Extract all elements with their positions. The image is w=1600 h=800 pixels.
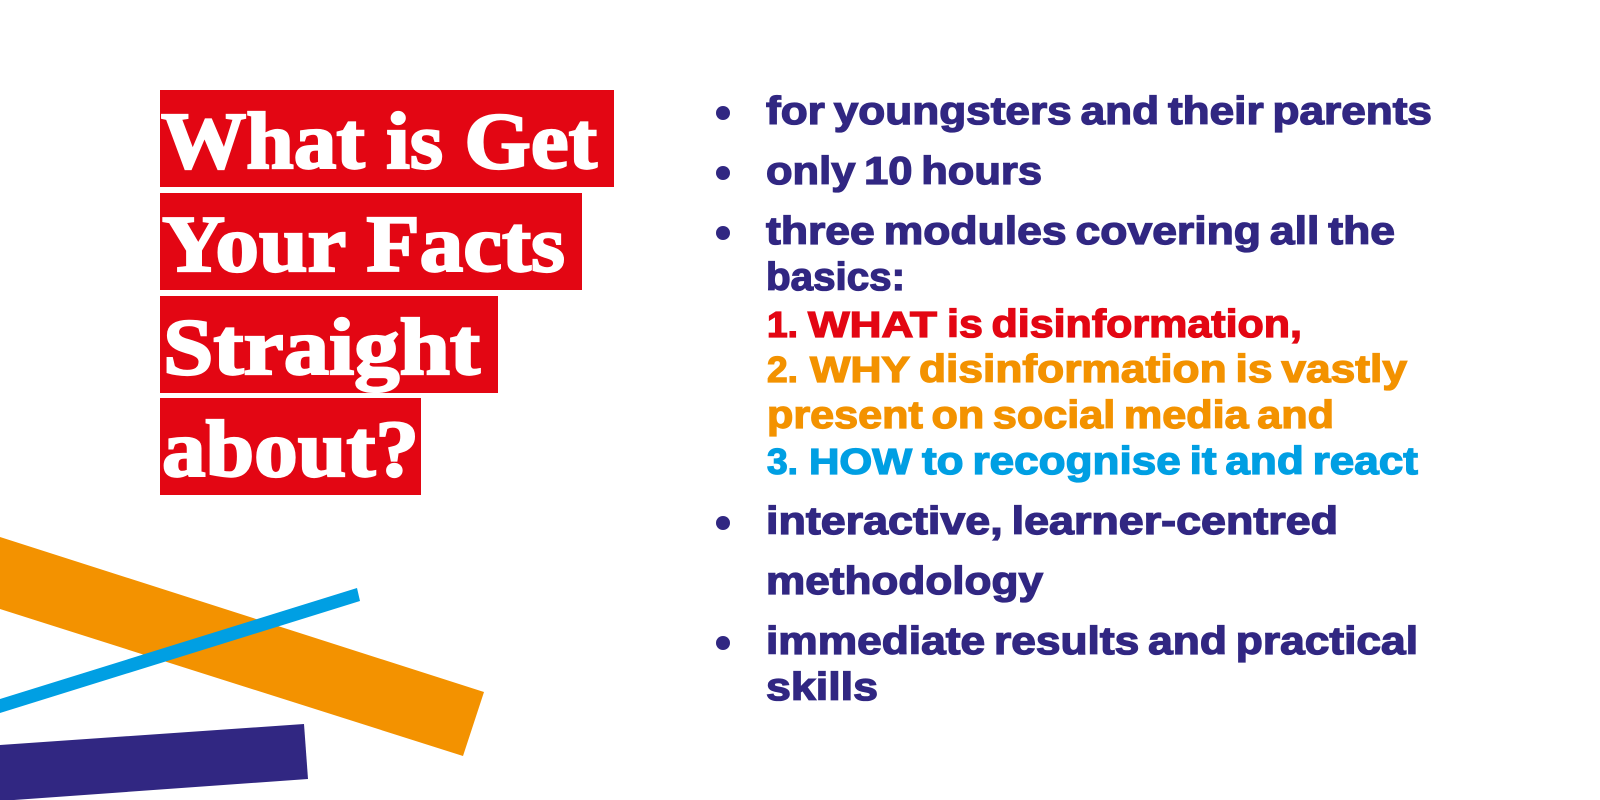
title line 1: What is Get xyxy=(161,98,597,186)
module 2: present on social media and xyxy=(767,394,1334,437)
bullet: results: skills xyxy=(766,666,878,709)
module 2: 2. xyxy=(767,349,798,390)
bullet: results: immediate results and practical xyxy=(766,620,1418,663)
module 1: WHAT xyxy=(808,304,937,345)
bullet: three modules xyxy=(716,210,1418,483)
bullet: results xyxy=(716,620,1418,709)
bullet: methodology: interactive, learner-centred xyxy=(766,500,1338,543)
bullet: methodology xyxy=(716,500,1338,603)
blue stripe xyxy=(0,588,360,713)
module 3 xyxy=(767,440,1418,483)
bullet: methodology: methodology xyxy=(766,560,1043,603)
module 3: to recognise it and react xyxy=(922,440,1418,483)
title block xyxy=(160,90,614,495)
bullet: three modules: basics: xyxy=(766,256,905,299)
module 2: disinformation is vastly xyxy=(919,348,1407,391)
title line 3: Straight xyxy=(163,304,480,392)
decorative stripes xyxy=(0,537,484,800)
bullet: audience: for youngsters and their parents xyxy=(766,90,1432,133)
module 3: 3. xyxy=(767,441,798,482)
bullet: three modules: three modules covering all the xyxy=(766,210,1395,253)
bullet: duration: only 10 hours xyxy=(766,150,1042,193)
module 3: HOW xyxy=(809,441,912,482)
module 1 xyxy=(767,303,1302,346)
module 2 xyxy=(767,348,1407,437)
module 1: is disinformation, xyxy=(947,303,1302,346)
bullet list xyxy=(716,90,1432,709)
title line 4: about? xyxy=(162,406,419,494)
module 1: 1. xyxy=(767,304,798,345)
title line 2: Your Facts xyxy=(162,201,565,289)
orange stripe xyxy=(0,537,484,756)
navy stripe xyxy=(0,724,308,800)
module 2: WHY xyxy=(810,349,910,390)
